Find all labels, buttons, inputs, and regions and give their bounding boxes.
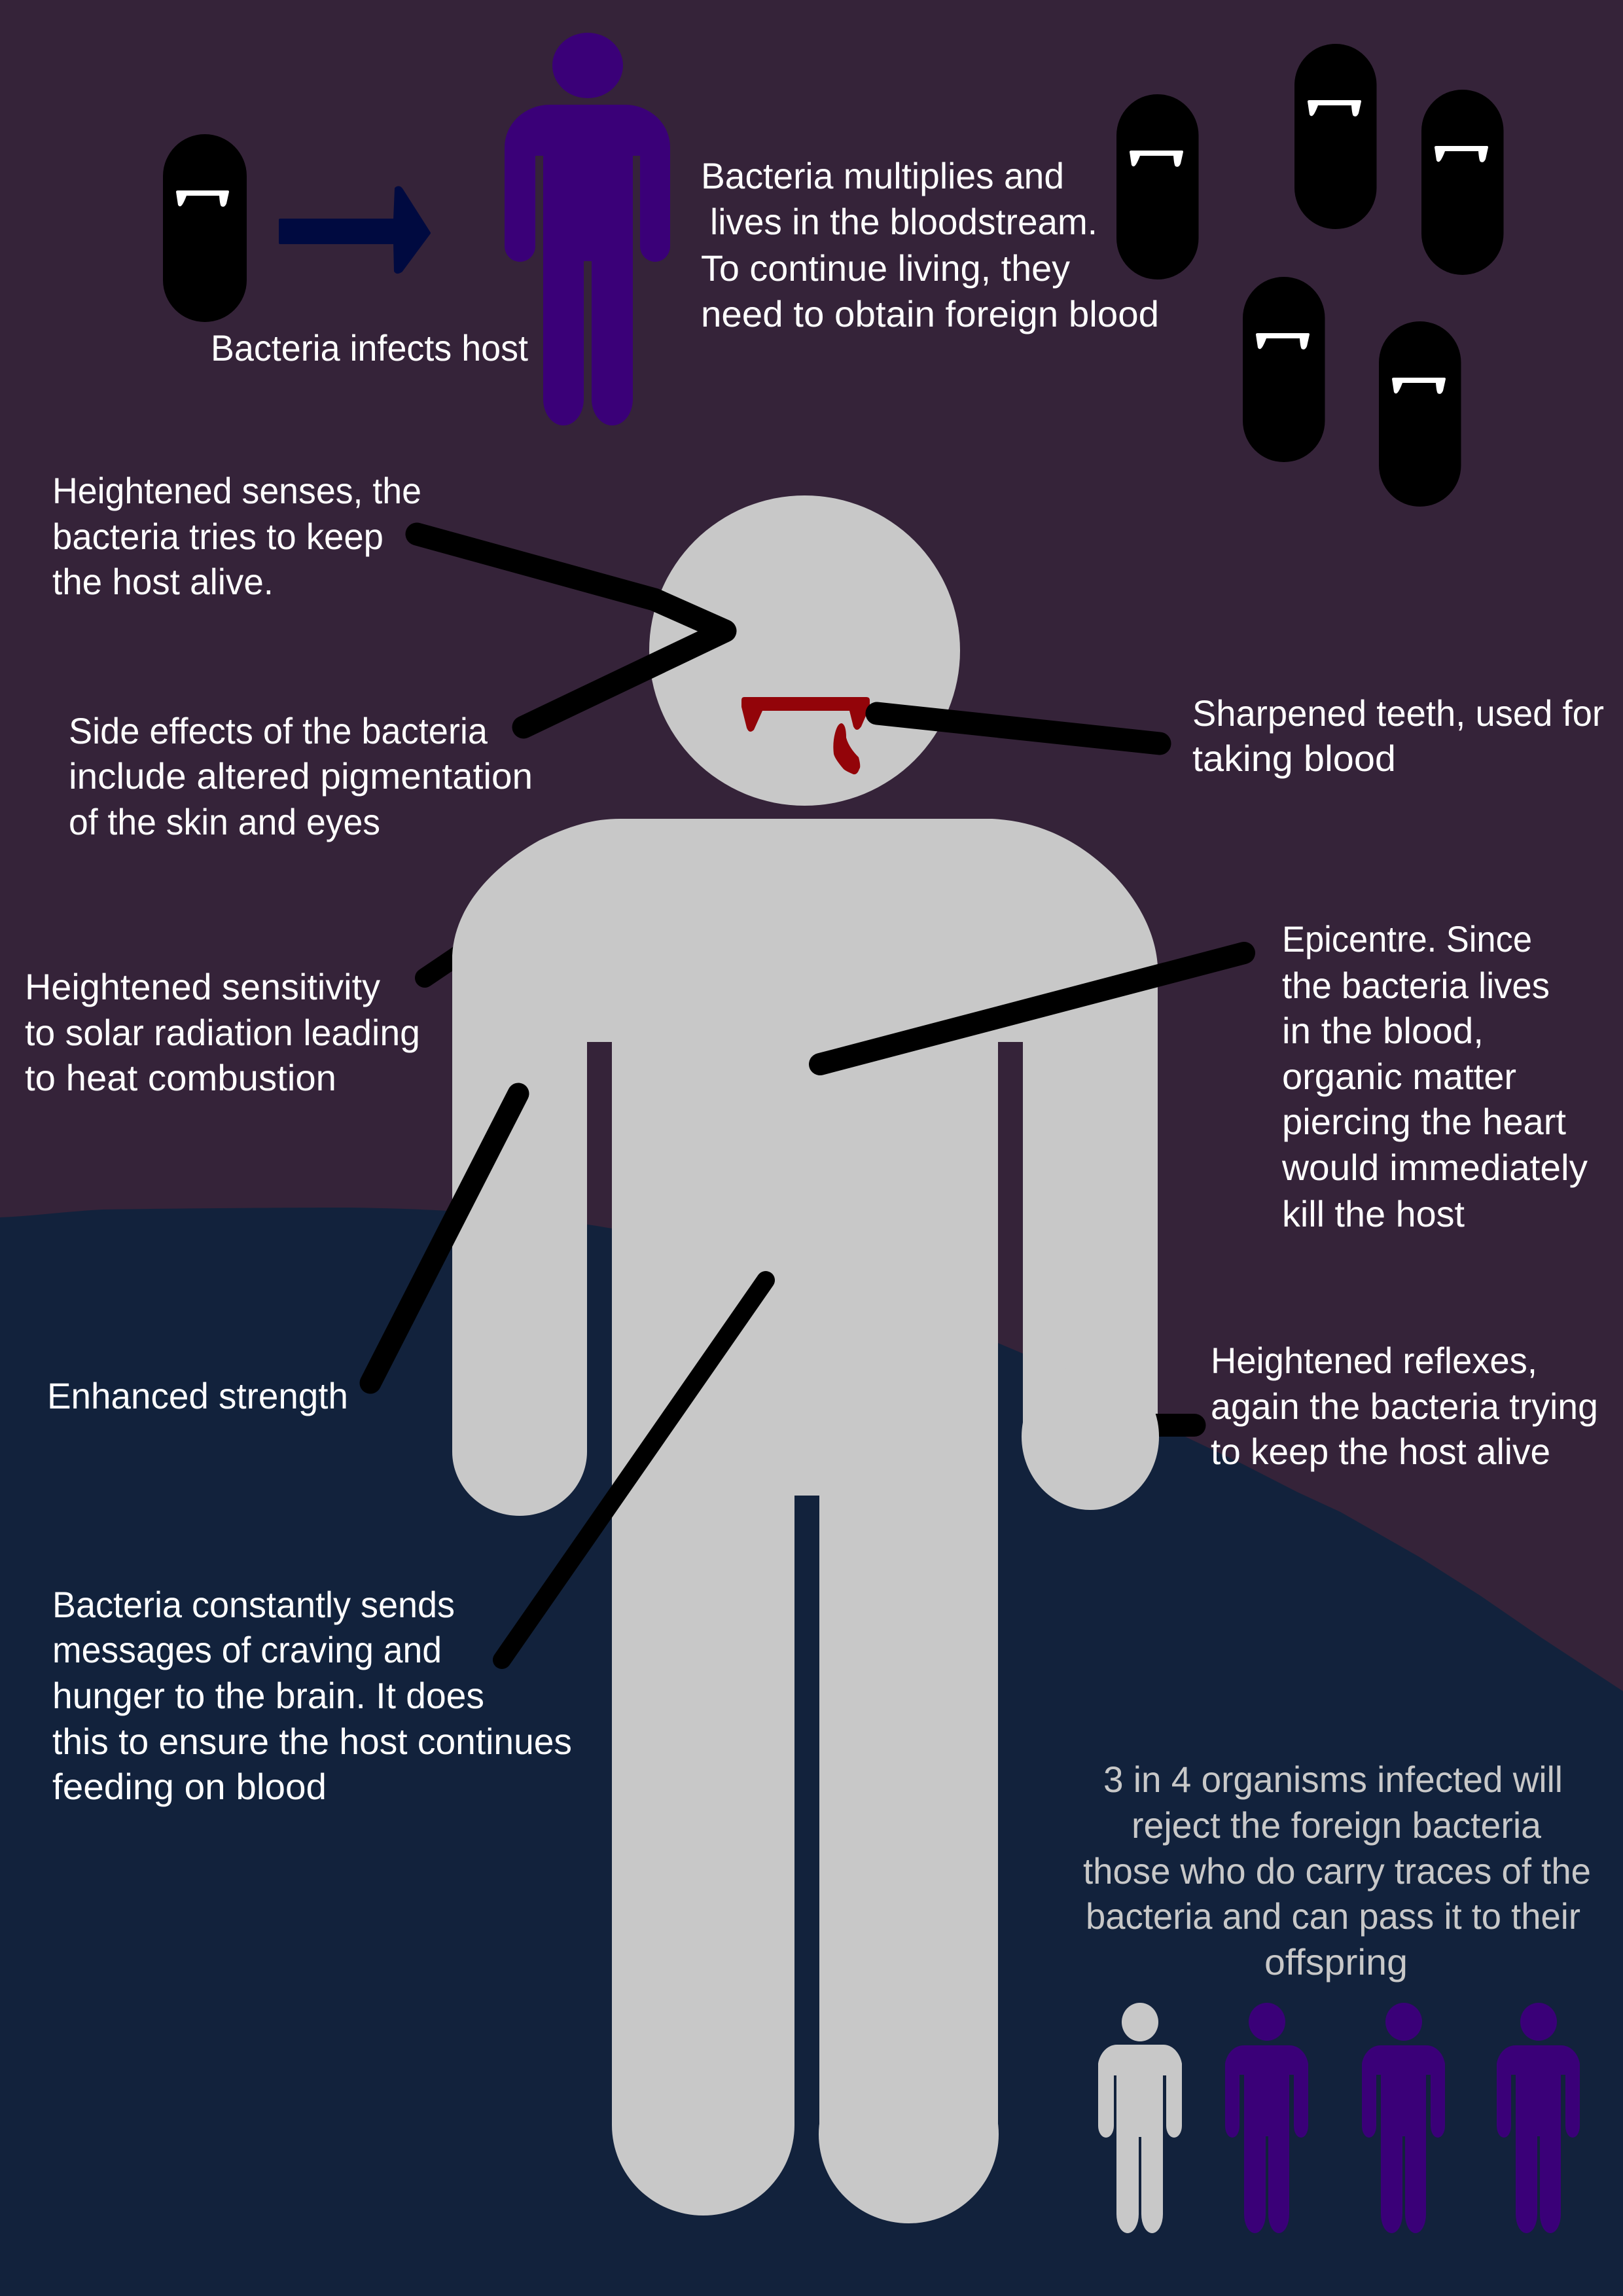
text: craving and hunger: feeding on blood bbox=[52, 1766, 327, 1807]
pointer: solar sensitivity stub bbox=[425, 946, 471, 978]
text: heightened reflexes: Heightened reflexes, bbox=[1211, 1340, 1537, 1381]
text: 3 in 4 statistic bbox=[1083, 1759, 1591, 1982]
text: solar sensitivity: to heat combustion bbox=[25, 1057, 336, 1098]
pointer: epicentre heart bbox=[820, 953, 1244, 1064]
main figure: grey infected host bbox=[452, 495, 1158, 2223]
bacterium 2 bbox=[1294, 44, 1377, 229]
text: 3 in 4 statistic: offspring bbox=[1264, 1941, 1408, 1982]
background: navy lower region bbox=[0, 1208, 1623, 2296]
text: epicentre: would immediately bbox=[1281, 1147, 1588, 1188]
text: heightened reflexes: again the bacteria trying bbox=[1211, 1386, 1598, 1427]
blood drip bbox=[833, 723, 860, 774]
text: heightened senses: Heightened senses, the bbox=[52, 470, 421, 511]
text: bacteria multiplies bbox=[701, 155, 1159, 334]
icon: purple host figure bbox=[505, 33, 670, 425]
text: solar sensitivity: to solar radiation leading bbox=[25, 1012, 420, 1053]
bacterium 5 bbox=[1379, 321, 1461, 507]
text: heightened senses: the host alive. bbox=[52, 561, 274, 602]
text: 3 in 4 statistic: bacteria and can pass it to their bbox=[1086, 1895, 1580, 1937]
main figure head bbox=[649, 495, 960, 806]
text: side effects: of the skin and eyes bbox=[69, 801, 380, 842]
text: side effects bbox=[69, 710, 533, 842]
main figure right hand bbox=[1022, 1363, 1159, 1510]
text: solar sensitivity: Heightened sensitivity bbox=[25, 966, 380, 1007]
text: craving and hunger bbox=[52, 1584, 572, 1807]
pointer: sharpened teeth bbox=[877, 713, 1160, 744]
text: craving and hunger: this to ensure the host continues bbox=[52, 1721, 572, 1762]
icon: bacteria infecting host bbox=[163, 134, 247, 322]
text: side effects: Side effects of the bacteria bbox=[69, 710, 488, 751]
text: heightened reflexes bbox=[1211, 1340, 1598, 1472]
text: heightened senses: bacteria tries to keep bbox=[52, 516, 383, 557]
text: epicentre bbox=[1281, 918, 1588, 1234]
text: epicentre: the bacteria lives bbox=[1282, 965, 1550, 1006]
text: craving and hunger: Bacteria constantly sends bbox=[52, 1584, 455, 1625]
pictogram: purple figure 2 bbox=[1225, 2003, 1308, 2233]
text: enhanced strength: Enhanced strength bbox=[47, 1375, 348, 1416]
pictogram: purple figure 3 bbox=[1362, 2003, 1445, 2233]
arrow: bacteria to host bbox=[280, 187, 429, 272]
text: sharpened teeth: taking blood bbox=[1192, 738, 1396, 779]
text: 3 in 4 statistic: 3 in 4 organisms infected will bbox=[1103, 1759, 1563, 1800]
text: craving and hunger: messages of craving and bbox=[52, 1629, 442, 1670]
text: side effects: include altered pigmentation bbox=[69, 755, 533, 797]
bacterium 1 bbox=[1116, 94, 1199, 279]
text: bacteria infects host: Bacteria infects host bbox=[211, 327, 528, 368]
text: 3 in 4 statistic: reject the foreign bacteria bbox=[1132, 1804, 1542, 1846]
text: epicentre: Epicentre. Since bbox=[1282, 918, 1532, 960]
icon group: multiplied bacteria bbox=[1116, 44, 1504, 507]
text: epicentre: kill the host bbox=[1282, 1193, 1465, 1234]
text: sharpened teeth bbox=[1192, 692, 1604, 779]
bacterium 3 bbox=[1421, 90, 1504, 275]
pointer: enhanced strength bbox=[370, 1094, 518, 1383]
pointer: craving and hunger bbox=[502, 1280, 766, 1660]
pictogram: purple figure 4 bbox=[1497, 2003, 1580, 2233]
text: solar sensitivity bbox=[25, 966, 420, 1098]
text: heightened senses bbox=[52, 470, 421, 602]
bacterium 4 bbox=[1243, 277, 1325, 462]
text: epicentre: in the blood, bbox=[1282, 1010, 1484, 1051]
text: bacteria multiplies: Bacteria multiplies and bbox=[701, 155, 1064, 196]
text: heightened reflexes: to keep the host alive bbox=[1211, 1431, 1550, 1472]
text: 3 in 4 statistic: those who do carry traces of the bbox=[1083, 1850, 1591, 1892]
main figure right foot bbox=[819, 2045, 999, 2223]
text: bacteria multiplies: To continue living, they bbox=[701, 247, 1070, 289]
main figure body bbox=[452, 819, 1158, 2215]
text: bacteria multiplies: lives in the bloodstream. bbox=[710, 201, 1097, 242]
text: sharpened teeth: Sharpened teeth, used for bbox=[1192, 692, 1604, 734]
pointer: heightened reflexes stub bbox=[1145, 1414, 1194, 1437]
text: epicentre: organic matter bbox=[1282, 1056, 1516, 1097]
pictogram: 1 grey of 4 figures bbox=[1098, 2003, 1182, 2233]
mouth with blood-red fangs bbox=[741, 697, 870, 732]
text: craving and hunger: hunger to the brain. It does bbox=[52, 1675, 484, 1716]
text: epicentre: piercing the heart bbox=[1282, 1101, 1566, 1142]
text: bacteria multiplies: need to obtain foreign blood bbox=[701, 293, 1159, 334]
pointer: heightened senses and pigmentation chevron bbox=[417, 534, 725, 727]
